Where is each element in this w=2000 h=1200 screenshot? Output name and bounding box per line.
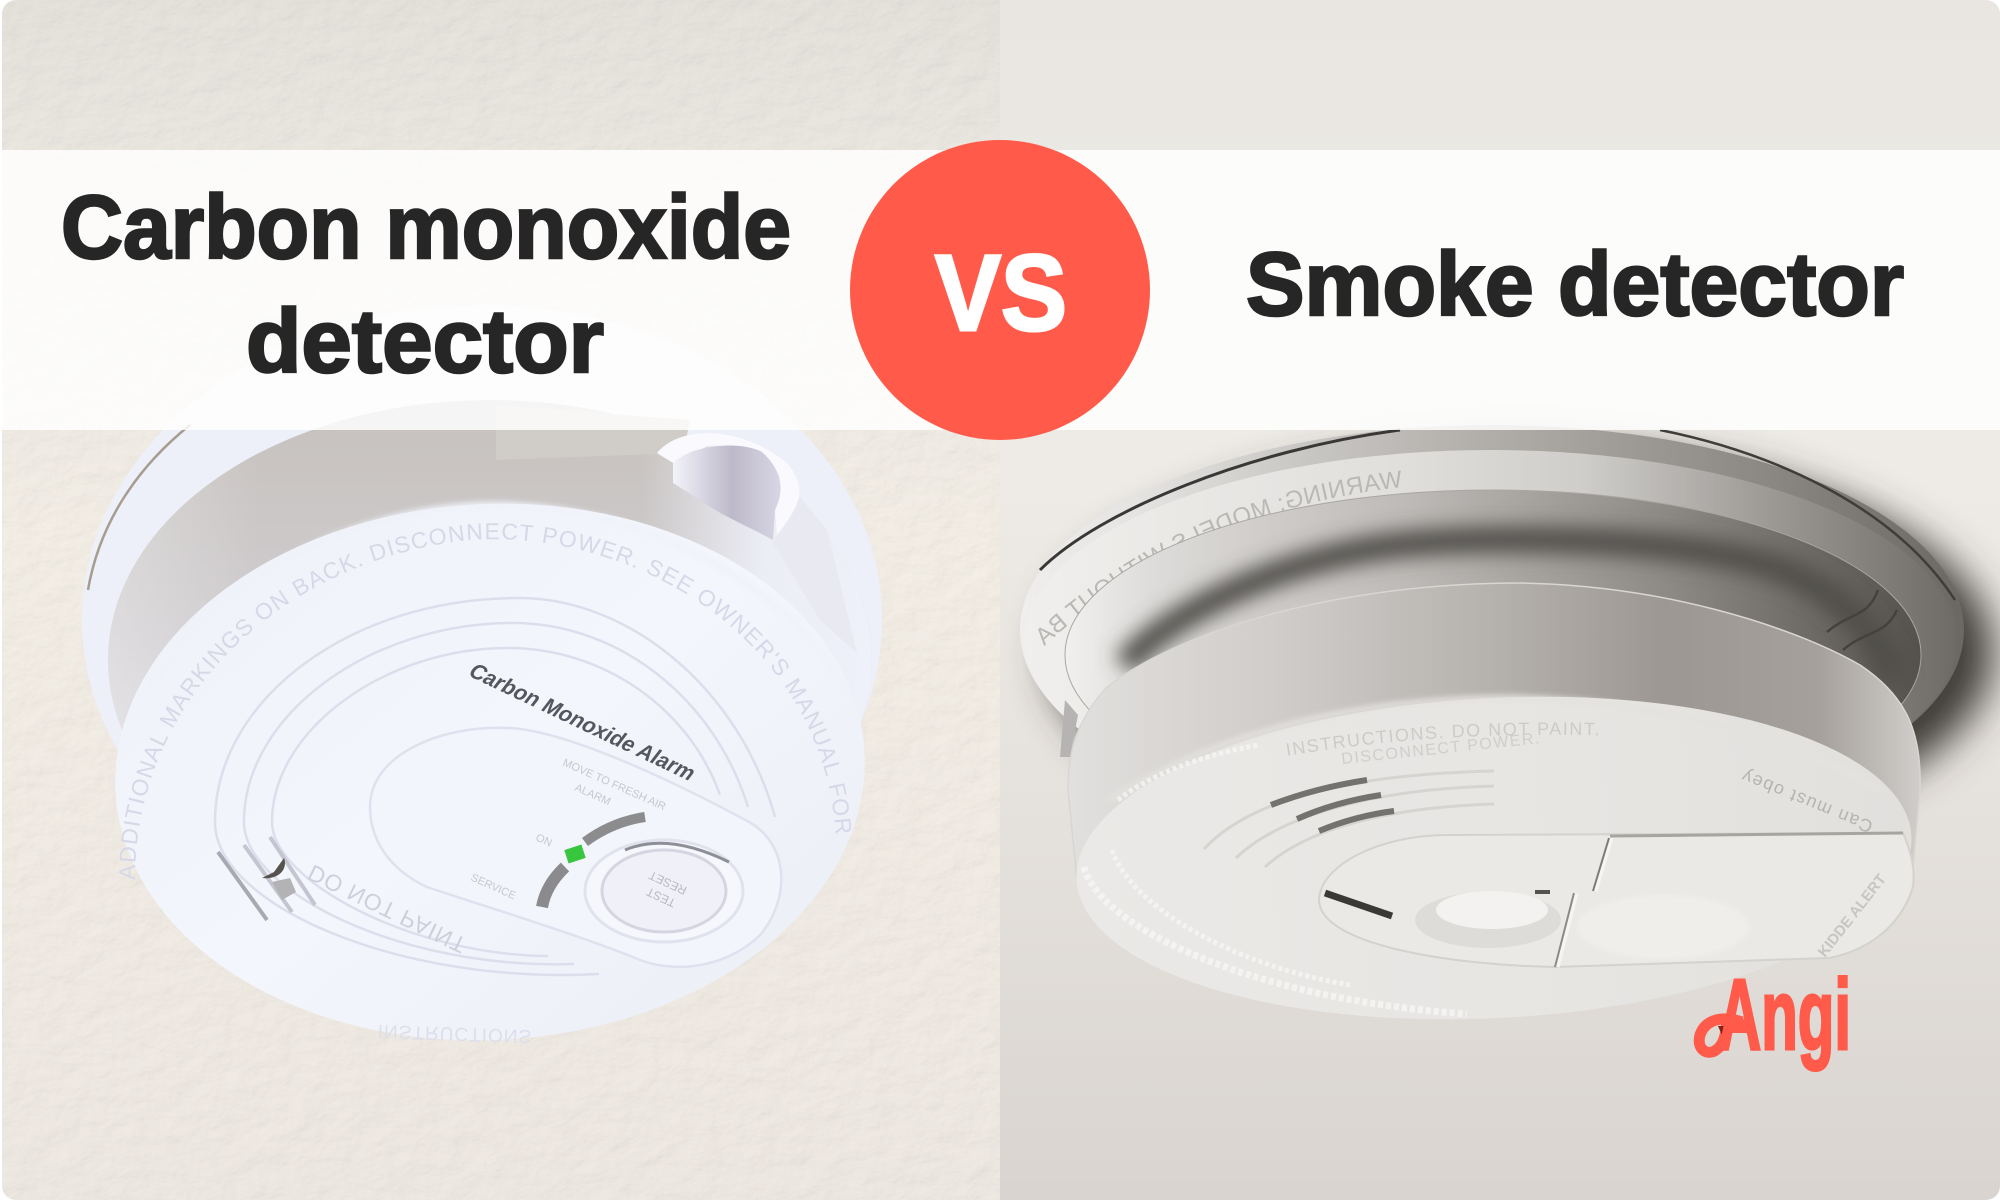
indicator: small labels: SERVICE xyxy=(469,872,518,902)
concentric ring grooves xyxy=(215,598,775,975)
VS badge xyxy=(850,140,1150,440)
logo fold xyxy=(1718,1026,1728,1042)
logo wordmark: Angi xyxy=(1718,959,1851,1071)
mounting plate xyxy=(1020,430,1964,729)
plate dark edge right xyxy=(1660,430,1955,600)
indicator: small labels: ON xyxy=(534,832,554,849)
indicator slots xyxy=(542,817,645,907)
embossed power text: DISCONNECT POWER. xyxy=(1341,730,1542,768)
background: right ceiling xyxy=(1000,0,2000,1200)
panel seams xyxy=(1555,833,1903,967)
wiring bump xyxy=(1827,590,1897,650)
battery tab xyxy=(496,430,688,458)
metal sensor glimpse xyxy=(262,858,296,900)
title: smoke detector: Smoke detector xyxy=(1246,235,1904,335)
do not paint text: DO NOT PAINT xyxy=(304,860,471,959)
plate dark edge left xyxy=(1040,430,1400,570)
clip at left edge xyxy=(1060,700,1078,757)
translucent title band xyxy=(0,150,2000,430)
plate shadow edge xyxy=(88,425,190,590)
recessed groove xyxy=(1064,490,1922,710)
VS circle xyxy=(850,140,1150,440)
background: left ceiling xyxy=(0,0,1000,1200)
detector side wall xyxy=(1068,583,1920,880)
wall shadow xyxy=(1050,447,1994,857)
embossed circular fine print xyxy=(1084,745,1467,1014)
raised ridge xyxy=(1146,450,1890,592)
detector side wall xyxy=(108,400,872,730)
cup arm xyxy=(657,433,799,535)
embossed face text: INSTRUCTIONS. DO NOT PAINT. xyxy=(1286,722,1598,756)
title line two: detector xyxy=(246,292,604,392)
control panel xyxy=(1319,833,1914,967)
title line one: Carbon monoxide xyxy=(61,178,791,278)
soft top edge of face xyxy=(316,499,601,539)
logo swash xyxy=(1699,1015,1742,1052)
lighter oval xyxy=(1577,895,1749,959)
pill-shaped recess xyxy=(370,728,781,967)
embossed bottom text: INSTRUCTIONS xyxy=(377,1020,533,1046)
embossed upside-down text right: Can must obey xyxy=(1738,766,1875,837)
sounder slots xyxy=(218,837,315,920)
plaster texture xyxy=(0,0,1000,1200)
green power LED xyxy=(564,845,586,863)
side wing below cup xyxy=(773,497,857,653)
indicator: small labels xyxy=(469,757,668,902)
embossed rim text: ADDITIONAL MARKINGS ON BACK. DISCONNECT POWER. SEE OWNER'S MANUAL FOR xyxy=(119,523,851,880)
cup recess xyxy=(673,445,781,540)
mounting plate xyxy=(82,430,882,750)
alarm label: Carbon Monoxide Alarm xyxy=(464,659,701,785)
black indicator slot xyxy=(1325,893,1392,916)
test button: RESET xyxy=(646,868,689,898)
test button: TEST xyxy=(644,884,678,910)
VS text: VS xyxy=(935,232,1067,353)
smoke detector photo illustration xyxy=(1018,425,2000,1019)
detector face xyxy=(101,485,879,1059)
test button dome xyxy=(1415,891,1561,948)
Angi logo xyxy=(1699,959,1851,1071)
test cylinder xyxy=(657,433,799,540)
groove dark shadow xyxy=(1125,539,1895,680)
indicator: small labels: ALARM xyxy=(573,782,612,808)
detector face xyxy=(1076,696,1912,1019)
title: carbon monoxide detector xyxy=(61,178,791,392)
indicator: small labels: MOVE TO FRESH AIR xyxy=(561,757,668,813)
test button xyxy=(585,840,743,942)
soft top edge of face xyxy=(1110,698,1880,800)
sounder slots xyxy=(1204,771,1494,867)
carbon monoxide detector photo illustration xyxy=(82,424,882,1044)
embossed text at right: KIDDE ALERT xyxy=(1815,871,1890,960)
